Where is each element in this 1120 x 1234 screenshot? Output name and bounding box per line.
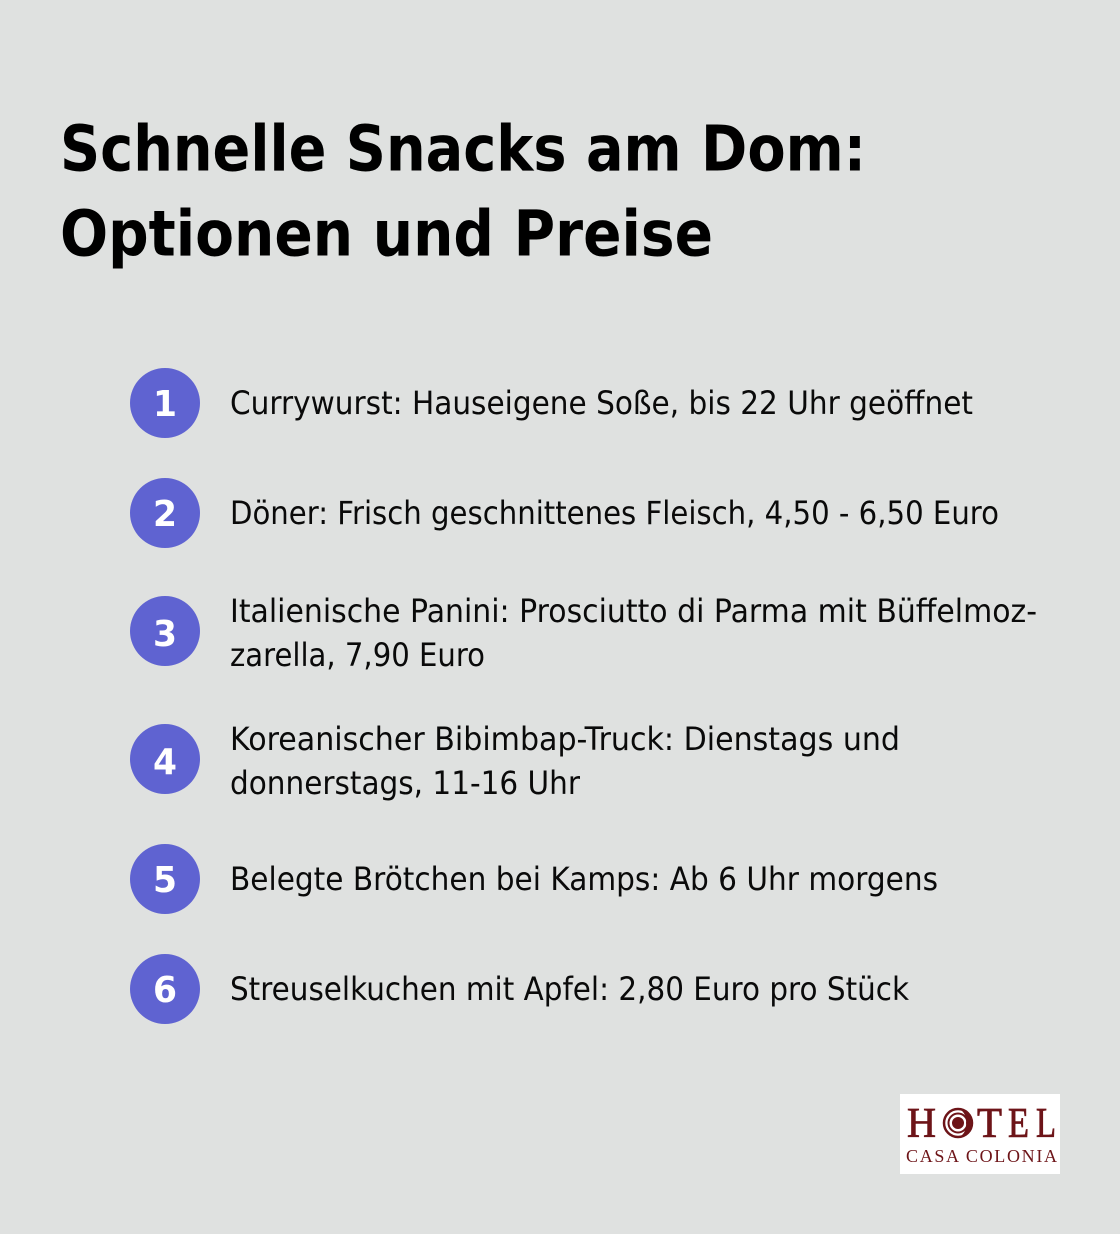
- logo: Hotel Casa Colonia: L: [1036, 1101, 1056, 1147]
- number badge 6: 6: [153, 970, 177, 1011]
- number badge 1: [130, 368, 200, 438]
- number badge 6: [130, 954, 200, 1024]
- item text 3: [230, 592, 1037, 674]
- title: [60, 112, 866, 270]
- number badge 1: 1: [153, 384, 177, 425]
- item text 3: Italienische Panini: Prosciutto di Parma mit Büffelmoz-: [230, 592, 1037, 630]
- list item 6: [130, 954, 909, 1024]
- list item 5: [130, 844, 938, 914]
- item text 4: donnerstags, 11-16 Uhr: [230, 764, 581, 802]
- list item 1: [130, 368, 973, 438]
- number badge 5: [130, 844, 200, 914]
- number badge 4: [130, 724, 200, 794]
- logo: Hotel Casa Colonia: [900, 1094, 1060, 1174]
- number badge 5: 5: [153, 860, 177, 901]
- logo: Hotel Casa Colonia: CASA COLONIA: [906, 1146, 1057, 1166]
- title: Schnelle Snacks am Dom:: [60, 112, 866, 186]
- item text 1: Currywurst: Hauseigene Soße, bis 22 Uhr geöffnet: [230, 384, 973, 422]
- title: Optionen und Preise: [60, 198, 713, 270]
- item text 4: [230, 720, 900, 802]
- logo: Hotel Casa Colonia: H: [907, 1101, 936, 1147]
- list item 4: [130, 720, 900, 802]
- item text 2: Döner: Frisch geschnittenes Fleisch, 4,50 - 6,50 Euro: [230, 494, 999, 532]
- list item 2: [130, 478, 999, 548]
- number badge 4: 4: [153, 742, 177, 783]
- item text 6: Streuselkuchen mit Apfel: 2,80 Euro pro Stück: [230, 970, 909, 1008]
- item text 3: zarella, 7,90 Euro: [230, 636, 485, 674]
- logo: Hotel Casa Colonia: E: [1008, 1101, 1029, 1147]
- list item 3: [130, 592, 1037, 674]
- number badge 2: [130, 478, 200, 548]
- number badge 3: [130, 596, 200, 666]
- item text 5: Belegte Brötchen bei Kamps: Ab 6 Uhr morgens: [230, 860, 938, 898]
- item text 4: Koreanischer Bibimbap-Truck: Dienstags und: [230, 720, 900, 758]
- icon: logo spiral O: [944, 1109, 972, 1137]
- logo: Hotel Casa Colonia: T: [977, 1101, 1002, 1147]
- number badge 2: 2: [153, 494, 177, 535]
- number badge 3: 3: [153, 614, 177, 655]
